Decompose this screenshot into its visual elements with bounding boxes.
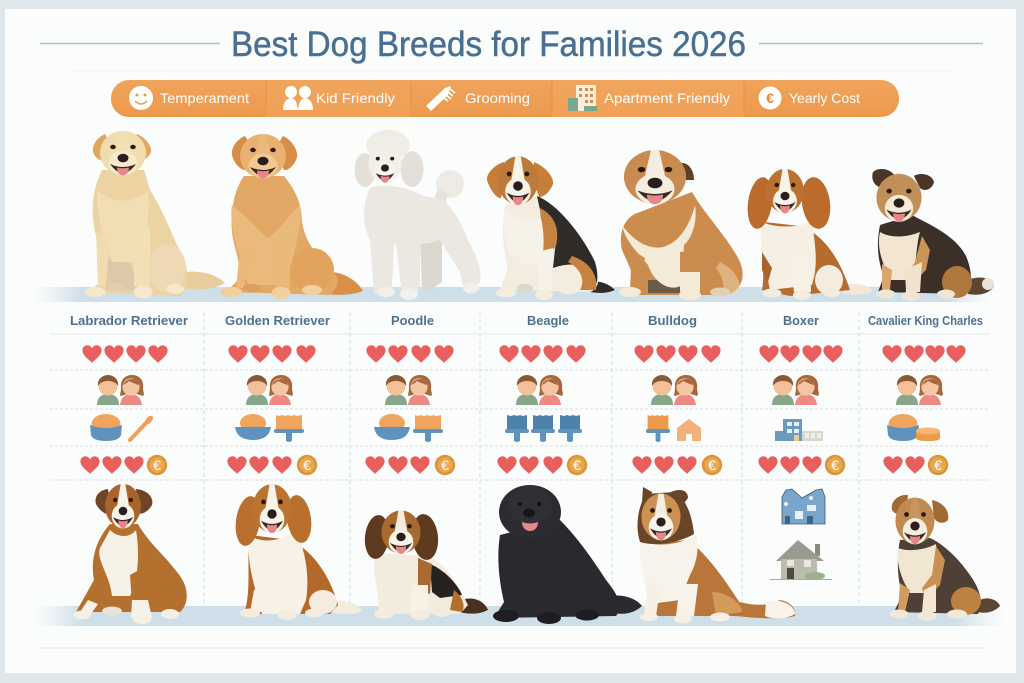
dog: Mixed breed: [872, 169, 994, 301]
cost: Beagle: [497, 455, 587, 475]
title: Best Dog Breeds for Families 2026: [231, 25, 746, 64]
legend: grooming: Grooming: [465, 90, 530, 106]
icon: Bulldog stand and house: [646, 415, 701, 442]
cost: Cavalier: [883, 455, 948, 475]
breed name labels: [70, 313, 983, 328]
dog: Labrador: [84, 131, 225, 298]
dog: Collie type: [638, 487, 795, 624]
cost: Boxer: [758, 455, 845, 475]
dog: black Newfoundland: [493, 485, 642, 624]
grid lines: [50, 312, 990, 604]
cost: Poodle: €: [441, 457, 449, 473]
legend: kid friendly: [283, 86, 395, 110]
bottom row dogs: [73, 484, 1000, 624]
dog: mixed breed sitter: [890, 495, 1000, 621]
cost: Poodle: [365, 455, 455, 475]
legend bar: [111, 80, 899, 117]
dog: Cavalier spaniel: [233, 484, 362, 620]
cost: Golden: €: [303, 457, 311, 473]
dog: Poodle: [354, 130, 480, 300]
yearly cost hearts and coins row: [80, 455, 948, 475]
kid friendly icons row: [97, 375, 943, 405]
dog: Boxer type: [73, 484, 187, 624]
legend: temperament: [129, 86, 249, 110]
breed name labels: Cavalier King Charles: [868, 313, 983, 328]
cost: Cavalier: €: [934, 457, 942, 473]
dog: Golden Retriever: [220, 134, 363, 299]
icon: grey house: [770, 540, 832, 580]
breed name labels: Beagle: [527, 313, 569, 328]
top row dogs: [84, 130, 994, 301]
icon: Boxer apartment: [775, 419, 823, 441]
icon: blue townhouses: [782, 489, 825, 524]
legend pill background: [111, 80, 899, 117]
title rules: [40, 42, 983, 44]
ground band top: [32, 287, 992, 302]
breed name labels: Boxer: [783, 313, 819, 328]
ground band bottom: [32, 606, 1005, 626]
cost: Labrador: [80, 455, 167, 475]
icon: Labrador bowl and spoon: [90, 414, 155, 441]
dog: Bulldog: [619, 150, 743, 300]
legend: yearly cost: Yearly Cost: [789, 90, 860, 106]
cost: Boxer: €: [831, 457, 839, 473]
breed name labels: Poodle: [391, 313, 434, 328]
cost: Bulldog: [632, 455, 722, 475]
icon: Golden dish and stand: [235, 414, 304, 442]
legend: yearly cost: €: [766, 90, 774, 106]
breed name labels: Labrador Retriever: [70, 313, 188, 328]
dog: Beagle: [487, 156, 615, 300]
cost: Bulldog: €: [708, 457, 716, 473]
legend: apartment friendly: [568, 85, 730, 111]
temperament hearts row: [82, 345, 966, 363]
legend: kid friendly: Kid Friendly: [316, 90, 395, 106]
breed name labels: Golden Retriever: [225, 313, 330, 328]
breed name labels: Bulldog: [648, 313, 697, 328]
dog: Cavalier: [744, 169, 873, 300]
icon: Beagle brushes: [505, 415, 582, 442]
icon: Cavalier bowl and tub: [887, 414, 940, 441]
cost: Golden: [227, 455, 317, 475]
icon: Poodle dish and stand: [374, 414, 443, 442]
cost: Labrador: €: [153, 457, 161, 473]
legend: yearly cost: [758, 86, 860, 110]
cost: Beagle: €: [573, 457, 581, 473]
legend: grooming: [426, 86, 530, 111]
legend: apartment friendly: Apartment Friendly: [604, 90, 730, 106]
legend: temperament: Temperament: [160, 90, 249, 106]
footer rule: [40, 647, 985, 649]
grooming and apartment icons row: [90, 414, 940, 442]
dog: small spaniel: [363, 511, 488, 620]
